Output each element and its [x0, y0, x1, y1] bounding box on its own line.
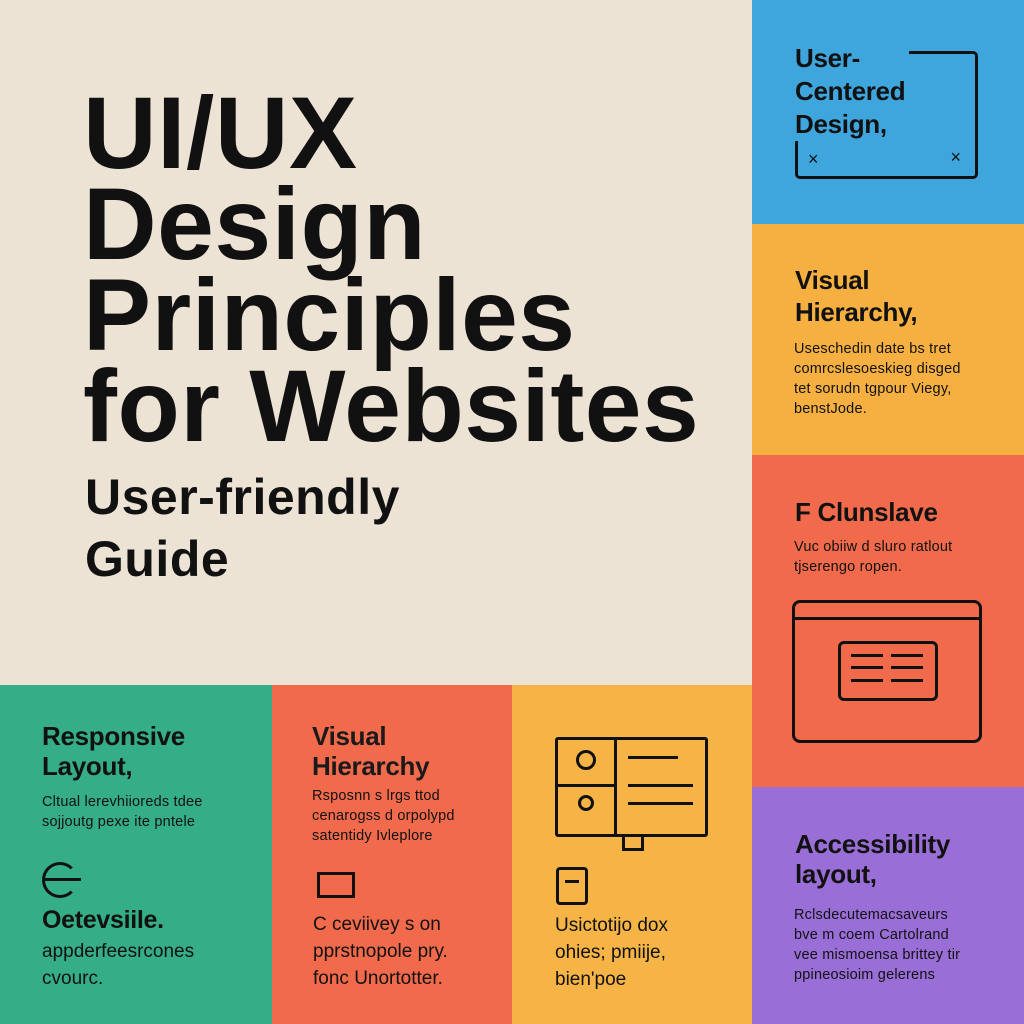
- heading: Visual: [312, 721, 386, 751]
- heading: Layout,: [42, 751, 132, 781]
- text: [42, 794, 203, 830]
- heading: [42, 721, 185, 781]
- text: sojjoutg pexe ite pntele: [42, 814, 195, 830]
- text: [794, 341, 961, 417]
- heading: Hierarchy: [312, 751, 429, 781]
- heading: Hierarchy,: [795, 297, 917, 327]
- heading: [795, 265, 917, 327]
- text: bve m coem Cartolrand: [794, 927, 949, 943]
- text: vee mismoensa brittey tir: [794, 947, 960, 963]
- panel: layout icon: [512, 685, 752, 1024]
- panel: visual hierarchy right: [752, 224, 1024, 455]
- title: UI/UX: [83, 76, 358, 190]
- heading: Responsive: [42, 721, 185, 751]
- text: Rclsdecutemacsaveurs: [794, 907, 948, 923]
- heading: Design,: [795, 109, 887, 139]
- text: cenarogss d orpolypd: [312, 808, 455, 824]
- text: [794, 539, 952, 575]
- subtitle: User-friendly: [85, 469, 400, 525]
- text: Rsposnn s lrgs ttod: [312, 788, 440, 804]
- text 2: appderfeesrcones: [42, 941, 194, 962]
- text: ohies; pmiije,: [555, 942, 666, 963]
- title: [83, 76, 699, 463]
- heading: Accessibility: [795, 829, 950, 859]
- text: Vuc obiiw d sluro ratlout: [794, 539, 952, 555]
- heading: [795, 829, 950, 889]
- text: [555, 915, 668, 990]
- text 2: [313, 914, 448, 989]
- heading: Visual: [795, 265, 869, 295]
- text: benstJode.: [794, 401, 867, 417]
- heading: F Clunslave: [795, 497, 938, 527]
- text: satentidy Ivleplore: [312, 828, 433, 844]
- heading: [312, 721, 430, 781]
- text: tet sorudn tgpour Viegy,: [794, 381, 951, 397]
- text 2: fonc Unortotter.: [313, 968, 443, 989]
- subtitle: Guide: [85, 531, 229, 587]
- text: tjserengo ropen.: [794, 559, 902, 575]
- heading: Centered: [795, 76, 905, 106]
- text: Cltual lerevhiioreds tdee: [42, 794, 203, 810]
- panel: responsive layout: [0, 685, 272, 1024]
- panel: accessibility: [752, 787, 1024, 1024]
- text: Usictotijo dox: [555, 915, 668, 936]
- title: Design: [83, 167, 426, 281]
- title: Principles: [83, 258, 576, 372]
- text 2: pprstnopole pry.: [313, 941, 448, 962]
- icon: window frame: ×: [808, 149, 819, 169]
- icon: frame: [317, 872, 355, 898]
- text: [794, 907, 960, 983]
- icon: browser window: [792, 600, 982, 743]
- icon: window frame: [795, 51, 978, 179]
- text: comrcslesoeskieg disged: [794, 361, 961, 377]
- heading 2: Oetevsiile.: [42, 906, 164, 934]
- text: [312, 788, 455, 844]
- text: bien'poe: [555, 969, 626, 990]
- panel: visual hierarchy bottom: [272, 685, 512, 1024]
- subtitle: [85, 469, 400, 587]
- text: ppineosioim gelerens: [794, 967, 935, 983]
- text: Useschedin date bs tret: [794, 341, 951, 357]
- panel: user-centered design: [752, 0, 1024, 224]
- panel: title area: [0, 0, 752, 685]
- icon: circle: [42, 862, 78, 898]
- title: for Websites: [83, 349, 699, 463]
- icon: document: [556, 867, 588, 905]
- heading: User-: [795, 43, 860, 73]
- heading: [795, 42, 909, 141]
- heading: layout,: [795, 859, 877, 889]
- icon: window frame: ×: [950, 147, 961, 167]
- icon: monitor: [555, 737, 708, 837]
- text 2: C ceviivey s on: [313, 914, 441, 935]
- text 2: [42, 941, 194, 989]
- text 2: cvourc.: [42, 968, 103, 989]
- panel: clunslave: [752, 455, 1024, 787]
